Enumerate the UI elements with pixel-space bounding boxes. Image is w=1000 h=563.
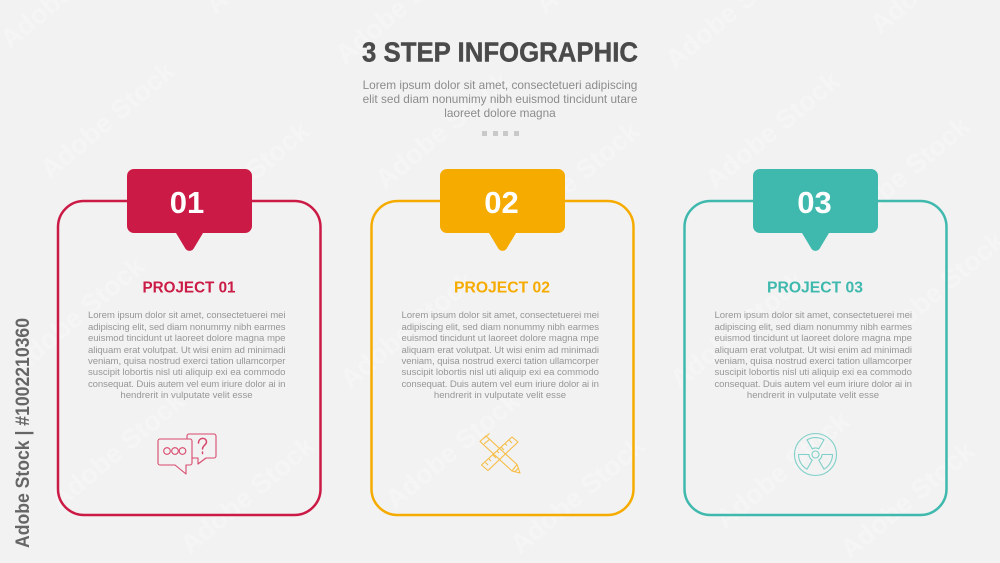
number badge 01: 01 — [170, 185, 204, 220]
watermark pattern: Adobe Stock — [5, 250, 151, 380]
subtitle text block: Lorem ipsum dolor sit amet, consectetueri adipiscing — [363, 78, 637, 92]
watermark pattern: Adobe Stock — [700, 65, 846, 195]
body text: project 01: veniam, quisa nostrud exerci tation ullamcorper — [88, 356, 286, 367]
panel: project 03 — [684, 169, 946, 515]
body text: project 03: veniam, quisa nostrud exerci tation ullamcorper — [714, 356, 913, 367]
body text: project 03: euismod tincidunt ut laoreet dolore magna mpe — [714, 333, 912, 344]
number badge 02 — [440, 169, 565, 251]
panel: project 02 — [372, 169, 634, 515]
stock id vertical text: Adobe Stock | #1002210360 — [13, 318, 34, 548]
heading: project 02: PROJECT 02 — [454, 280, 550, 296]
body text: project 02: Lorem ipsum dolor sit amet, consectetuerei mei — [402, 310, 599, 321]
number badge 03: 03 — [797, 185, 832, 220]
body text: project 02: veniam, quisa nostrud exerci tation ullamcorper — [402, 356, 600, 367]
body text: project 03: Lorem ipsum dolor sit amet, consectetuerei mei — [714, 310, 912, 321]
body text: project 02: hendrerit in vulputate velit esse — [434, 390, 566, 401]
watermark pattern: Adobe Stock — [380, 385, 526, 515]
heading: project 03: PROJECT 03 — [767, 280, 863, 296]
number badge 03 — [753, 169, 878, 251]
watermark pattern: Adobe Stock — [505, 430, 651, 560]
body text: project 02: suscipit lobortis nisl uti aliquip exi ea commodo — [402, 367, 599, 378]
body text: project 03: suscipit lobortis nisl uti aliquip exi ea commodo — [714, 367, 912, 378]
watermark pattern: Adobe Stock — [830, 110, 976, 240]
body text: project 03: consequat. Duis autem vel eum iriure dolor ai in — [714, 379, 912, 390]
body text: project 02: aliquam erat volutpat. Ut wisi enim ad minimadi — [402, 345, 599, 356]
body text: project 03: hendrerit in vulputate velit esse — [747, 390, 879, 401]
watermark pattern: Adobe Stock — [370, 65, 516, 195]
heading: project 01: PROJECT 01 — [142, 280, 236, 296]
watermark pattern: Adobe Stock — [835, 435, 981, 563]
subtitle text block — [363, 78, 638, 120]
number badge 01 — [127, 169, 252, 251]
body text: project 01: hendrerit in vulputate velit esse — [120, 390, 253, 401]
body text: project 03: adipiscing elit, sed diam nonummy nibh earmes — [714, 322, 912, 333]
body text: project 03 — [714, 310, 913, 401]
title: 3 STEP INFOGRAPHIC — [362, 36, 638, 68]
watermark pattern: Adobe Stock — [710, 405, 856, 535]
watermark pattern: Adobe Stock — [35, 55, 181, 185]
watermark pattern: Adobe Stock — [335, 265, 481, 395]
watermark pattern: Adobe Stock — [45, 385, 191, 515]
watermark pattern: Adobe Stock — [175, 430, 321, 560]
panel: project 01 — [58, 169, 320, 515]
subtitle text block: elit sed diam nonumimy nibh euismod tincidunt utare — [363, 92, 638, 106]
body text: project 01: aliquam erat volutpat. Ut wisi enim ad minimadi — [88, 345, 286, 356]
watermark pattern: Adobe Stock — [500, 115, 646, 245]
number badge 02: 02 — [484, 185, 519, 220]
body text: project 01 — [88, 310, 286, 401]
body text: project 01: consequat. Duis autem vel eum iriure dolor ai in — [88, 379, 286, 390]
watermark pattern: Adobe Stock — [170, 115, 316, 245]
body text: project 02 — [402, 310, 600, 401]
body text: project 01: adipiscing elit, sed diam nonummy nibh earmes — [88, 322, 286, 333]
icon: radiation symbol — [794, 434, 836, 476]
icon: pencil and ruler — [480, 434, 520, 473]
watermark pattern: Adobe Stock — [665, 265, 811, 395]
body text: project 01: Lorem ipsum dolor sit amet, consectetuerei mei — [88, 310, 286, 321]
body text: project 02: consequat. Duis autem vel eum iriure dolor ai in — [402, 379, 599, 390]
body text: project 02: adipiscing elit, sed diam nonummy nibh earmes — [402, 322, 599, 333]
body text: project 01: euismod tincidunt ut laoreet dolore magna mpe — [88, 333, 286, 344]
body text: project 03: aliquam erat volutpat. Ut wisi enim ad minimadi — [714, 345, 912, 356]
subtitle text block: laoreet dolore magna — [444, 106, 556, 120]
icon: chat bubbles — [158, 434, 216, 474]
title divider dots — [482, 131, 519, 136]
body text: project 01: suscipit lobortis nisl uti aliquip exi ea commodo — [88, 367, 286, 378]
body text: project 02: euismod tincidunt ut laoreet dolore magna mpe — [402, 333, 599, 344]
